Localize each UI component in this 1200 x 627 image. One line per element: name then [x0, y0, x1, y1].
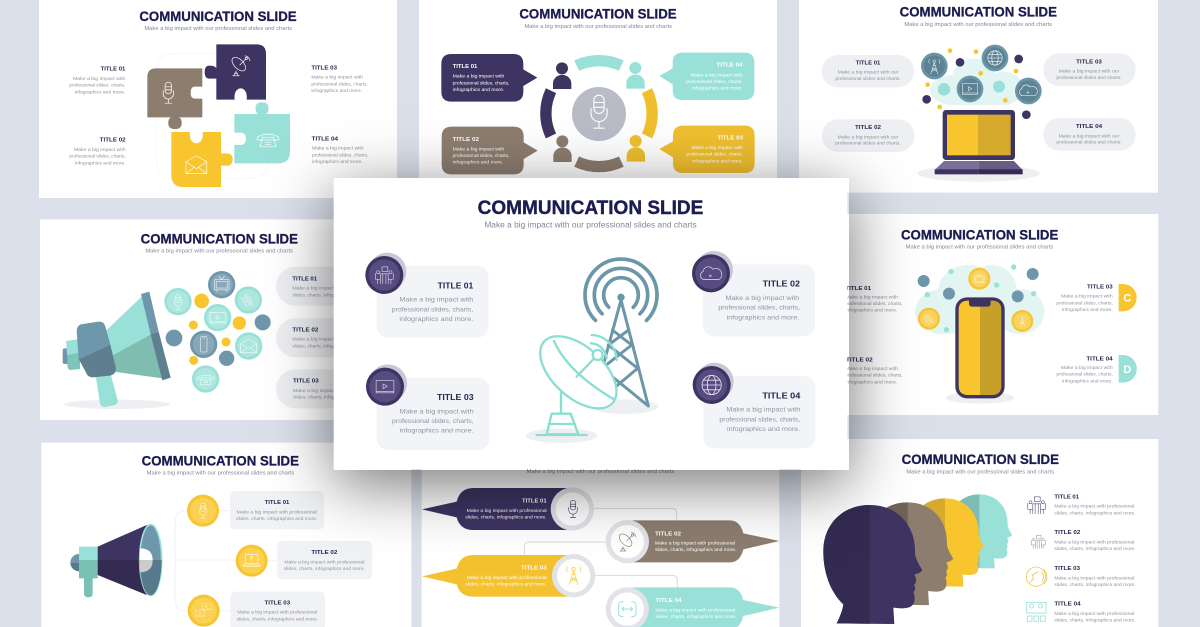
subheading: Make a big impact with our professional slides and charts — [906, 469, 1054, 475]
text block: title 02: infographics and more. — [75, 160, 126, 166]
list item: title 01: Make a big impact with professional — [1054, 504, 1134, 510]
head: teal — [960, 494, 1012, 568]
subheading: Make a big impact with our professional slides and charts — [904, 22, 1052, 28]
text block: title 01: TITLE 01 — [845, 286, 871, 292]
list item: title 01: TITLE 01 — [1054, 494, 1079, 500]
text block: title 03 with C tab: C — [1123, 293, 1131, 305]
text block: title 03 with C tab — [1056, 284, 1137, 313]
text block: title 01 — [69, 67, 126, 95]
icon circle: globe — [982, 45, 1008, 71]
list item: title 02 — [1031, 530, 1136, 552]
text block: title 01: infographics and more. — [845, 308, 897, 314]
icon: microphone — [163, 82, 173, 103]
text block: title 03: TITLE 03 — [311, 65, 337, 71]
pill: title 01: professional slides and charts. — [835, 76, 901, 82]
item card: title 03: TITLE 03 — [264, 600, 290, 606]
text block: title 04 — [312, 136, 368, 165]
item card: title 03: slides, charts, infographics and more. — [237, 616, 318, 622]
bubble: title 01: Make a big impact with — [453, 74, 505, 80]
pill: title 04: professional slides and charts. — [1056, 140, 1122, 146]
arrow tag: title 01: TITLE 01 — [522, 498, 547, 504]
subheading: Make a big impact with our professional slides and charts — [527, 469, 675, 475]
bubble: title 03: TITLE 03 — [717, 136, 743, 142]
icon circle: global — [693, 363, 734, 404]
heading: COMMUNICATION SLIDE — [139, 9, 297, 24]
item card: title 02 — [277, 541, 372, 579]
arrow tag: title 03: slides, charts, infographics and more. — [465, 582, 547, 588]
text block: title 04 with D tab: infographics and more. — [1062, 378, 1113, 384]
text block: title 03 with C tab: infographics and more. — [1062, 307, 1113, 313]
panel: central card — [334, 178, 847, 469]
icon bubble: mobile — [190, 331, 217, 358]
smartphone — [946, 297, 1014, 404]
text block: title 03: infographics and more. — [311, 88, 362, 94]
pill: title 01 — [276, 267, 443, 306]
icon: satellite dish — [230, 55, 250, 76]
arrow tag: title 04: slides, charts, infographics and more. — [655, 614, 737, 620]
bubble: title 04: Make a big impact with — [691, 72, 743, 78]
text block: title 04 with D tab: Make a big impact with — [1061, 365, 1113, 371]
arrow tag: title 01 — [422, 487, 594, 531]
text block: title 03 with C tab: professional slides, charts, — [1056, 300, 1113, 306]
panel: speech bubble ring slide — [419, 0, 777, 180]
item card: title 03 — [230, 592, 325, 627]
arrow tag: title 04: TITLE 04 — [655, 598, 683, 604]
text card: title 02: TITLE 02 — [763, 280, 801, 289]
bubble: title 01: TITLE 01 — [453, 64, 477, 70]
pill: title 03: TITLE 03 — [1076, 59, 1102, 65]
subheading: Make a big impact with our professional slides and charts — [524, 24, 672, 30]
pill: title 01: Make a big impact with our — [838, 70, 899, 76]
list item: title 04: Make a big impact with professional — [1054, 611, 1134, 617]
head: yellow — [923, 498, 984, 587]
pill: title 02: Make a big impact with — [292, 337, 345, 343]
arrow tag: title 03 — [422, 554, 595, 597]
text block: title 01: professional slides, charts, — [845, 301, 903, 307]
pill: title 02: TITLE 02 — [855, 125, 881, 131]
bubble: title 04: TITLE 04 — [716, 63, 744, 69]
item card: title 03: Make a big impact with professional — [237, 610, 317, 616]
text block: title 03: Make a big impact with — [311, 75, 363, 81]
text card: title 02: infographics and more. — [727, 314, 799, 321]
pill: title 04: Make a big impact with our — [1059, 133, 1120, 139]
heading: COMMUNICATION SLIDE — [901, 227, 1058, 242]
head: navy — [823, 505, 922, 624]
medallion: chat — [968, 268, 990, 290]
arrow tag: title 01: Make a big impact with professional — [467, 508, 547, 514]
text card: title 01: TITLE 01 — [438, 281, 474, 290]
heading: COMMUNICATION SLIDE — [902, 452, 1059, 467]
list item: title 01 — [1028, 494, 1136, 516]
icon bubble: envelope — [235, 332, 262, 360]
bubble: title 01 — [441, 54, 537, 102]
text card: title 02 — [703, 264, 815, 336]
text card: title 03: professional slides, charts, — [392, 418, 474, 425]
text block: title 04: professional slides, charts, — [312, 152, 368, 158]
icon circle: monitors — [188, 595, 220, 627]
icon: telephone — [257, 134, 279, 147]
arrow tag: title 04 — [606, 587, 779, 627]
text card: title 01: Make a big impact with — [399, 297, 474, 304]
bubble: title 03: Make a big impact with — [691, 145, 743, 151]
megaphone — [63, 292, 171, 409]
pill: title 03 — [276, 369, 443, 408]
text block: title 04 with D tab: D — [1123, 364, 1131, 376]
text block: title 01: Make a big impact with — [845, 294, 898, 300]
list item: title 02: slides, charts, infographics and more. — [1054, 546, 1136, 552]
pill: title 01: slides, charts, infographics — [292, 292, 350, 298]
item card: title 01: Make a big impact with professional — [237, 509, 317, 515]
item card: title 02: Make a big impact with professional — [284, 559, 364, 565]
text block: title 01 — [845, 286, 903, 314]
text block: title 01: TITLE 01 — [101, 67, 125, 73]
bubble: title 04: professional slides, charts, — [686, 79, 743, 85]
list item: title 03: Make a big impact with professional — [1054, 575, 1134, 581]
icon circle: tower — [921, 53, 948, 79]
text card: title 03: infographics and more. — [400, 428, 474, 435]
bubble: title 02: TITLE 02 — [453, 137, 479, 143]
text block: title 04 with D tab: TITLE 04 — [1086, 356, 1114, 362]
list item: title 02: Make a big impact with professional — [1054, 539, 1134, 545]
pill: title 04: TITLE 04 — [1076, 124, 1103, 130]
subheading: Make a big impact with our professional slides and charts — [144, 26, 292, 32]
pill: title 04 — [1043, 118, 1136, 151]
decorative dots — [166, 294, 271, 366]
item card: title 02: slides, charts, infographics and more. — [284, 566, 365, 572]
text card: title 04: TITLE 04 — [762, 391, 801, 400]
text block: title 02: professional slides, charts, — [845, 373, 903, 379]
heading: COMMUNICATION SLIDE — [519, 7, 677, 22]
icon bubble: television — [208, 271, 235, 298]
panel: heads slide — [801, 439, 1158, 627]
head: brown — [886, 502, 954, 606]
text block: title 03: professional slides, charts, — [311, 81, 368, 87]
icon bubble: video — [204, 304, 231, 331]
text block: title 04: Make a big impact with — [312, 146, 364, 152]
heading: COMMUNICATION SLIDE — [478, 197, 703, 219]
text block: title 02: TITLE 02 — [846, 358, 873, 364]
pill: title 01: TITLE 01 — [856, 60, 880, 66]
list item: title 04: slides, charts, infographics and more. — [1054, 618, 1136, 624]
text card: title 02: professional slides, charts, — [718, 305, 800, 312]
list item: title 04: TITLE 04 — [1054, 602, 1082, 608]
text block: title 01: Make a big impact with — [73, 76, 126, 82]
text card: title 02: Make a big impact with — [725, 295, 800, 302]
centre circle with microphone — [572, 87, 626, 141]
panel: megaphone timeline slide — [41, 443, 411, 627]
text card: title 04: Make a big impact with — [726, 407, 801, 414]
pill: title 03: Make a big impact with — [293, 388, 346, 394]
icon circle: video — [957, 76, 983, 102]
text block: title 04: TITLE 04 — [312, 136, 339, 142]
item card: title 02: TITLE 02 — [311, 550, 337, 556]
panel: arrow tags slide — [422, 460, 779, 627]
text card: title 04: infographics and more. — [727, 426, 800, 433]
icon bubble: microphone — [164, 288, 192, 315]
icon circle: meeting — [365, 253, 406, 294]
heading: COMMUNICATION SLIDE — [142, 454, 299, 469]
pill: title 01: TITLE 01 — [292, 276, 317, 282]
item card: title 01: TITLE 01 — [265, 500, 289, 506]
icon circle: cloud — [1015, 78, 1042, 104]
arrow tag: title 03: TITLE 03 — [521, 565, 547, 571]
pill: title 03 — [1043, 53, 1136, 86]
arrow tag: title 02: slides, charts, infographics and more. — [655, 547, 736, 553]
pill: title 01: Make a big impact with — [292, 286, 345, 292]
pill: title 02: Make a big impact with our — [838, 134, 899, 140]
text block: title 02 — [845, 358, 903, 385]
list item: title 03: TITLE 03 — [1054, 566, 1080, 572]
item card: title 01 — [230, 491, 324, 529]
subheading: Make a big impact with our professional slides and charts — [145, 248, 293, 254]
heading: COMMUNICATION SLIDE — [900, 5, 1057, 20]
bubble: title 02 — [442, 127, 538, 174]
heading: COMMUNICATION SLIDE — [141, 231, 298, 246]
subheading: Make a big impact with our professional slides and charts — [147, 471, 295, 477]
cloud with dots — [915, 264, 1044, 334]
icon circle: cloud — [692, 251, 733, 292]
panel: laptop slide — [799, 0, 1158, 193]
arrow tag: title 02: TITLE 02 — [655, 531, 681, 537]
text block: title 02 — [69, 138, 126, 166]
bubble: title 02: Make a big impact with — [453, 146, 505, 152]
pill: title 02: professional slides and charts. — [835, 141, 901, 147]
icon circle: microphone — [187, 495, 219, 527]
ring arcs — [546, 61, 652, 167]
pill: title 03: TITLE 03 — [293, 379, 319, 385]
person: brown — [553, 135, 572, 162]
bubble: title 03: professional slides, charts, — [686, 152, 743, 158]
panel: megaphone with icon bubbles slide — [40, 219, 443, 420]
laptop — [918, 110, 1040, 182]
cloud with dots — [922, 48, 1031, 119]
bubble: title 02: infographics and more. — [453, 160, 503, 166]
arrow tag: title 02 — [606, 520, 779, 563]
bubble: title 04 — [659, 53, 754, 100]
text block: title 03 with C tab: TITLE 03 — [1087, 285, 1113, 291]
list item: title 01: slides, charts, infographics and more. — [1054, 510, 1136, 516]
illustration: satellite dish — [526, 323, 629, 443]
text block: title 04 with D tab: professional slides, charts, — [1056, 372, 1113, 378]
bubble: title 03: infographics and more. — [692, 158, 743, 164]
icon circle: laptop — [236, 545, 268, 577]
arrow tag: title 02: Make a big impact with professional — [655, 540, 735, 546]
list item: title 03 — [1026, 566, 1136, 588]
pill: title 02 — [822, 119, 914, 152]
icon bubble: telephone — [192, 365, 219, 393]
person: teal — [626, 62, 645, 89]
puzzle piece: brown — [147, 68, 202, 129]
pill: title 02: TITLE 02 — [292, 328, 318, 334]
arrow tag: title 04: Make a big impact with professional — [655, 607, 735, 613]
text card: title 01: infographics and more. — [399, 316, 473, 323]
text block: title 04: infographics and more. — [312, 159, 363, 165]
pill: title 02: slides, charts, infographics — [292, 343, 350, 349]
person: navy — [553, 62, 571, 89]
icon: envelope — [186, 156, 207, 173]
list item: title 02: TITLE 02 — [1054, 530, 1080, 536]
text card: title 01: professional slides, charts, — [392, 306, 473, 313]
pill: title 01 — [822, 55, 914, 87]
text block: title 02: Make a big impact with — [845, 366, 898, 372]
medallion: antenna — [1011, 310, 1033, 332]
text card: title 03 — [377, 378, 489, 450]
panel: smartphone slide — [827, 214, 1158, 415]
text card: title 01 — [377, 266, 489, 338]
megaphone — [70, 525, 162, 597]
pill: title 03: Make a big impact with our — [1059, 69, 1120, 75]
text block: title 02: Make a big impact with — [74, 147, 126, 153]
list item: title 03: slides, charts, infographics and more. — [1054, 582, 1136, 588]
subheading: Make a big impact with our professional slides and charts — [484, 220, 697, 229]
pill: title 03: professional slides and charts. — [1056, 75, 1122, 81]
illustration: radio tower — [585, 259, 658, 414]
card drop shadow — [334, 178, 849, 470]
arrow tag: title 01: slides, charts, infographics and more. — [465, 515, 547, 521]
icon circle: video — [366, 364, 407, 406]
subheading: Make a big impact with our professional slides and charts — [906, 245, 1054, 251]
puzzle piece: yellow — [171, 132, 233, 187]
item card: title 01: slides, charts, infographics and more. — [236, 516, 317, 522]
text block: title 01: professional slides, charts, — [69, 83, 125, 89]
pill: title 02 — [276, 318, 443, 357]
bubble: title 02: professional slides, charts, — [453, 153, 509, 159]
arrow tag: title 03: Make a big impact with professional — [467, 575, 547, 581]
pill: title 03: slides, charts, infographics — [293, 395, 351, 401]
icon bubble: call — [235, 286, 262, 314]
text block: title 03 — [311, 65, 368, 94]
text block: title 04 with D tab — [1056, 355, 1137, 384]
text block: title 03 with C tab: Make a big impact with — [1061, 294, 1113, 300]
text block: title 02: professional slides, charts, — [69, 154, 126, 160]
bubble: title 03 — [659, 126, 755, 173]
text card: title 03: Make a big impact with — [400, 408, 474, 415]
puzzle piece: teal — [234, 102, 290, 163]
puzzle piece: navy — [205, 44, 266, 100]
bubble: title 01: infographics and more. — [453, 87, 504, 93]
medallion: call — [918, 308, 940, 330]
text card: title 04: professional slides, charts, — [719, 416, 800, 423]
text card: title 04 — [703, 376, 815, 448]
text block: title 02: infographics and more. — [845, 379, 897, 385]
text block: title 01: infographics and more. — [75, 89, 125, 95]
bubble: title 04: infographics and more. — [692, 86, 743, 92]
text block: title 02: TITLE 02 — [100, 138, 126, 144]
list item: title 04 — [1027, 602, 1136, 624]
bubble: title 01: professional slides, charts, — [453, 80, 509, 86]
person: yellow — [627, 135, 645, 162]
panel: puzzle slide — [39, 0, 397, 198]
text card: title 03: TITLE 03 — [437, 393, 474, 402]
